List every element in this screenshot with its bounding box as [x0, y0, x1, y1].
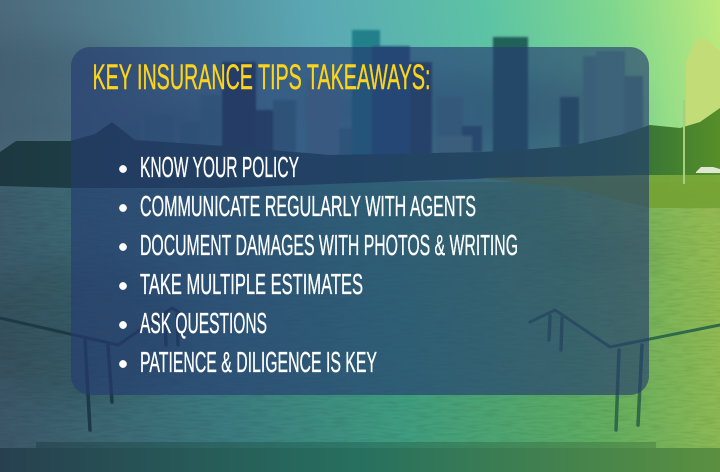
- list item: estimates: [119, 269, 363, 301]
- background: submerged stairs: [0, 442, 720, 472]
- icon: parked car: [696, 167, 720, 173]
- list item: know your policy: KNOW YOUR POLICY: [140, 152, 299, 184]
- panel: takeaways card: [71, 47, 649, 395]
- background: cloud shading: [0, 40, 640, 147]
- background: skyline buildings: [120, 30, 643, 162]
- title: KEY INSURANCE TIPS TAKEAWAYS:: [92, 58, 430, 97]
- icon: far right tower: [686, 39, 720, 128]
- background: right grass bank: [480, 175, 720, 208]
- background: water ripple texture: [0, 190, 720, 450]
- list item: know your policy: [119, 152, 299, 184]
- background: flooded water: [0, 182, 720, 472]
- list item: document damages: [119, 230, 518, 262]
- bullet list: [119, 152, 518, 379]
- list item: questions: ASK QUESTIONS: [140, 308, 267, 340]
- background: water shadows: [0, 200, 670, 400]
- background: tree line: [0, 108, 720, 188]
- background: sky gradient: [0, 0, 720, 200]
- list item: communicate: [119, 191, 476, 223]
- list item: patience: [119, 347, 377, 379]
- right flood railing: [530, 310, 720, 430]
- list item: estimates: TAKE MULTIPLE ESTIMATES: [140, 269, 363, 301]
- background: lamp post: [683, 100, 685, 184]
- left flood railing: [0, 308, 180, 430]
- list item: questions: [119, 308, 267, 340]
- list item: patience: PATIENCE & DILIGENCE IS KEY: [140, 347, 377, 379]
